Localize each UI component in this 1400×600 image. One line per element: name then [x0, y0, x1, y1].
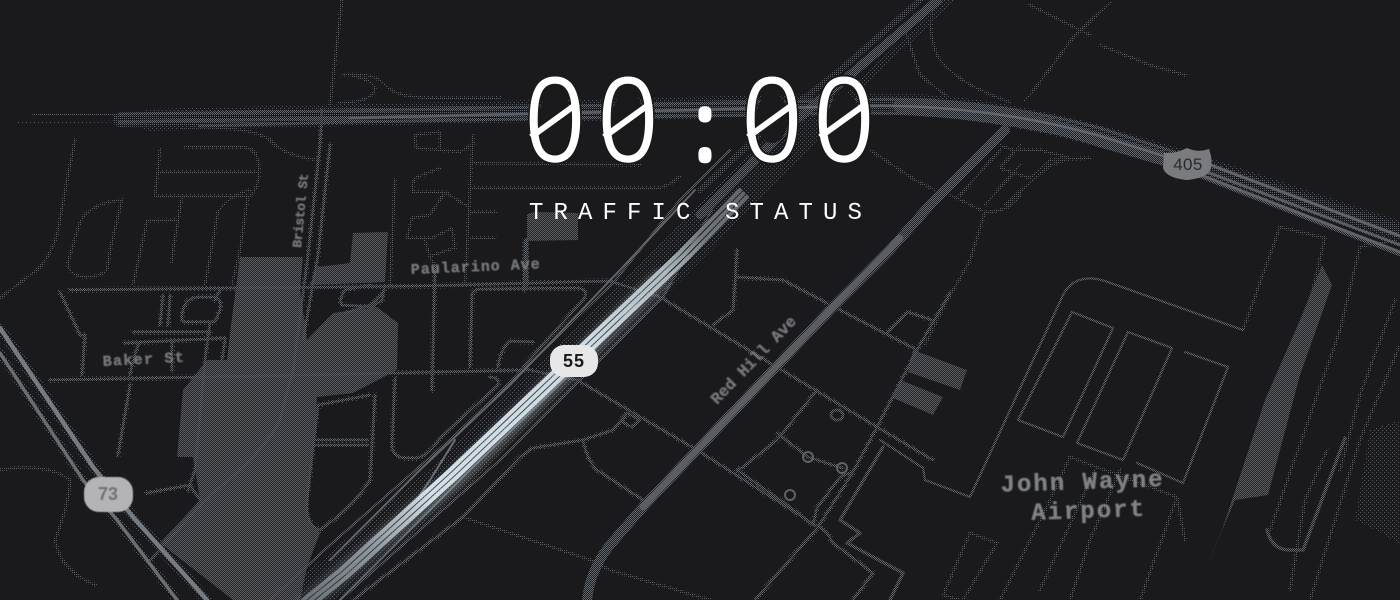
road junction circles — [785, 410, 847, 500]
road: freeway 55 halo — [305, 130, 800, 600]
road: freeway 73 — [0, 328, 207, 600]
label: Red Hill Ave: Red Hill Ave — [708, 313, 801, 408]
secondary roads — [50, 110, 950, 600]
label: Baker St: Baker St — [102, 350, 186, 371]
clock colon: : — [673, 75, 737, 196]
highway shield: 55 — [550, 345, 598, 377]
highway shield: 405: 405 — [1173, 155, 1203, 174]
highway shield: 55: 55 — [563, 351, 585, 371]
label: John Wayne Airport: John Wayne — [1000, 467, 1165, 500]
road: freeway 55 glow — [305, 280, 660, 600]
label: Paularino Ave: Paularino Ave — [410, 256, 541, 279]
label: John Wayne Airport: Airport — [1031, 497, 1146, 528]
digit centre masks — [539, 93, 860, 143]
highway shield: 73: 73 — [98, 484, 118, 504]
airport perimeter and terminals — [880, 278, 1345, 550]
highway shield: 405 — [1163, 148, 1212, 180]
road: freeway 55 lanes — [303, 190, 747, 600]
map: dithered land blocks — [160, 212, 1400, 600]
subtitle: traffic status: TRAFFIC STATUS — [529, 200, 872, 227]
map labels — [102, 173, 1166, 529]
secondary road halo — [50, 110, 950, 600]
digit slashes — [531, 103, 867, 137]
label: Bristol St: Bristol St — [290, 173, 312, 248]
clock — [522, 55, 877, 203]
thick outer roads near the airport — [840, 447, 903, 600]
road: freeway 405 — [17, 99, 1400, 255]
road: freeway 55 side ramps — [270, 0, 950, 600]
highway shield: 73 — [84, 477, 133, 512]
road: Red Hill Ave — [587, 130, 1005, 600]
clock digits: 0000 — [522, 55, 877, 203]
